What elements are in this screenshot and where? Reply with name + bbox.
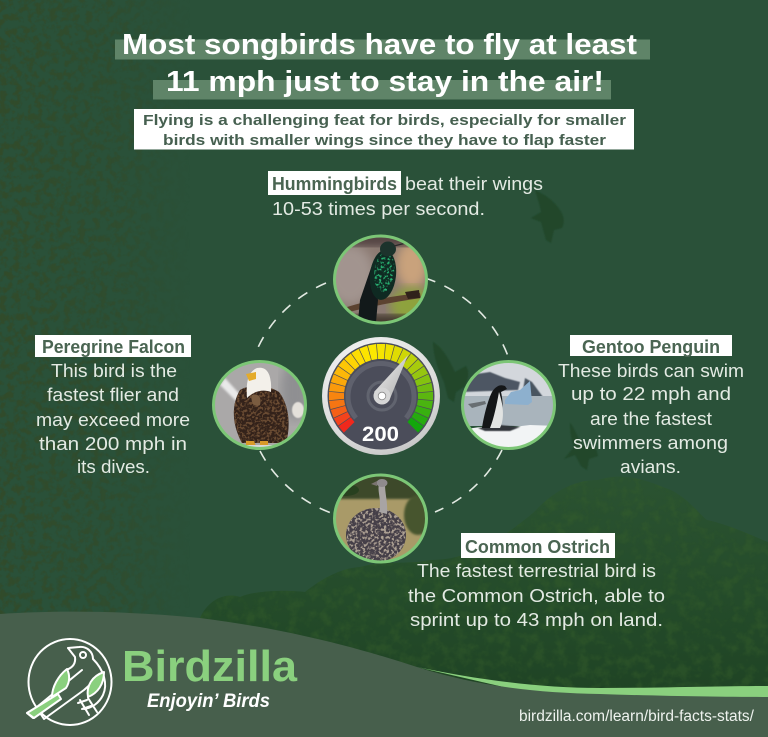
title: 11 mph just to stay in the air! xyxy=(166,66,604,98)
text block: peregrine falcon: Peregrine Falcon xyxy=(42,337,185,357)
gauge needle xyxy=(374,355,408,404)
text block: common ostrich: sprint up to 43 mph on land. xyxy=(410,610,663,630)
silhouette: flying bird upper right xyxy=(531,190,564,243)
logo leaf wing left xyxy=(52,669,69,697)
text block: common ostrich: Common Ostrich xyxy=(465,537,610,557)
text block: common ostrich: the Common Ostrich, able to xyxy=(408,586,665,606)
text block: common ostrich: The fastest terrestrial bird is xyxy=(417,561,656,581)
photo: ostrich xyxy=(333,474,428,564)
footer band xyxy=(0,612,768,737)
tagline: Enjoyin’ Birds xyxy=(147,691,270,712)
text block: hummingbirds: beat their wings xyxy=(405,174,543,194)
text block: peregrine falcon xyxy=(35,335,191,477)
title xyxy=(115,29,650,100)
text block: gentoo penguin: up to 22 mph and xyxy=(571,384,731,404)
text block: common ostrich xyxy=(408,533,665,630)
photo: hummingbird xyxy=(333,234,428,324)
silhouette: flying bird behind gauge xyxy=(433,342,468,402)
title: Most songbirds have to fly at least xyxy=(122,29,637,61)
brand name: Birdzilla xyxy=(122,642,298,691)
photo: eagle xyxy=(210,358,310,453)
subtitle xyxy=(134,109,634,150)
source url: birdzilla.com/learn/bird-facts-stats/ xyxy=(519,708,755,725)
text block: hummingbirds: Hummingbirds xyxy=(272,174,397,194)
text block: gentoo penguin: are the fastest xyxy=(590,409,712,429)
subtitle: birds with smaller wings since they have to flap faster xyxy=(163,132,606,149)
icon: birdzilla logo xyxy=(27,639,112,725)
photo: penguin xyxy=(461,360,556,450)
canopy of trees at bottom right xyxy=(200,477,768,688)
subtitle: Flying is a challenging feat for birds, especially for smaller xyxy=(143,112,626,129)
gauge: 200 xyxy=(362,423,399,446)
text block: gentoo penguin: These birds can swim xyxy=(558,361,744,381)
logo tail xyxy=(27,694,61,718)
gauge xyxy=(322,337,440,455)
text block: gentoo penguin: swimmers among xyxy=(573,433,728,453)
text block: gentoo penguin: avians. xyxy=(620,457,681,477)
left tree foliage xyxy=(0,0,132,614)
text block: gentoo penguin xyxy=(558,335,744,477)
text block: peregrine falcon: fastest flier and xyxy=(47,385,179,405)
text block: hummingbirds: 10-53 times per second. xyxy=(272,199,485,219)
logo leaf wing right xyxy=(88,672,104,697)
text block: peregrine falcon: its dives. xyxy=(77,457,150,477)
dashed ring xyxy=(256,278,510,515)
silhouette: flying bird right xyxy=(564,423,598,470)
text block: peregrine falcon: than 200 mph in xyxy=(39,434,187,454)
text block: peregrine falcon: This bird is the xyxy=(51,361,177,381)
text block: peregrine falcon: may exceed more xyxy=(36,410,190,430)
text block: gentoo penguin: Gentoo Penguin xyxy=(582,337,720,357)
text block: hummingbirds xyxy=(268,171,543,219)
gauge colour scale xyxy=(329,344,433,433)
